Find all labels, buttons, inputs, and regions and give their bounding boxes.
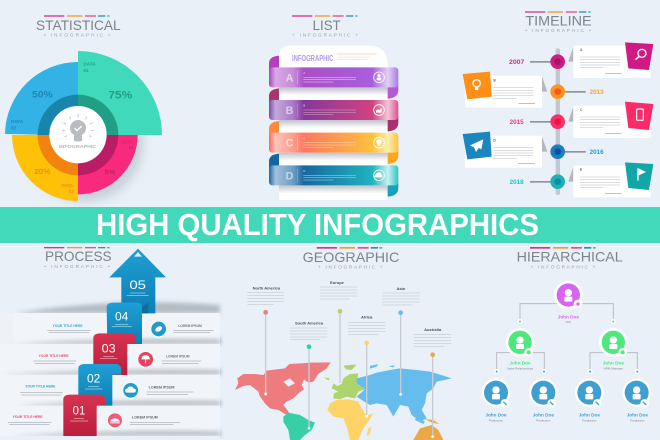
step 04: 04	[115, 310, 129, 324]
ribbon B: B	[286, 105, 294, 117]
pie chart: 20%	[34, 167, 51, 176]
node: hr manager: HRM Manager	[604, 366, 623, 370]
node: top	[554, 281, 583, 324]
ribbon A	[269, 56, 398, 99]
panel: geographic	[235, 247, 452, 440]
node: production 3: John Doe	[579, 413, 600, 418]
event 2013	[463, 72, 604, 108]
node: sales manager	[506, 328, 534, 370]
panel: statistical	[5, 15, 162, 202]
event 2013: 2013	[590, 89, 604, 96]
ribbon B: B	[303, 104, 305, 108]
arrow step 05: 05	[129, 278, 146, 292]
event 2018	[510, 162, 653, 197]
heading: list: LIST	[313, 17, 341, 33]
ribbon C: C	[303, 136, 305, 140]
heading: process: • INFOGRAPHIC •	[44, 264, 110, 269]
heading: timeline: • INFOGRAPHIC •	[525, 28, 591, 33]
pie chart: DATA	[62, 183, 74, 188]
pin: europe	[320, 280, 357, 383]
step 02: 02	[87, 372, 101, 386]
node: production 3	[575, 378, 604, 423]
center disc	[49, 106, 107, 163]
heading: list: + INFOGRAPHIC +	[292, 33, 358, 38]
panel: list	[269, 15, 398, 200]
row 01 text: LOREM IPSUM	[132, 416, 158, 420]
step 03: 03	[102, 341, 116, 355]
pie chart: 50%	[32, 90, 53, 100]
process bands	[0, 302, 220, 440]
step 02	[78, 364, 121, 406]
step 04	[107, 303, 148, 344]
event 2007: A	[580, 48, 583, 52]
ribbon A: A	[286, 72, 294, 84]
ribbon A: A	[303, 71, 305, 75]
row 01 text	[8, 411, 180, 429]
ribbon D	[269, 154, 398, 197]
segment: 20%	[12, 135, 78, 201]
continent: africa	[327, 399, 373, 440]
event 2007	[509, 42, 653, 78]
pin: africa	[348, 315, 385, 418]
step 01	[63, 395, 106, 436]
pin: europe: Europe	[330, 280, 345, 285]
pie chart: DATA	[83, 62, 96, 67]
center disc: INFOGRAPHIC	[59, 144, 97, 150]
banner	[0, 207, 660, 243]
heading: geographic	[303, 247, 399, 270]
node: production 1	[482, 378, 510, 423]
row 04 text: YOUR TITLE HERE	[53, 324, 83, 328]
panel: timeline	[463, 11, 653, 197]
node: production 1: John Doe	[485, 413, 507, 418]
event 2015: C	[580, 108, 583, 112]
ribbon D: D	[286, 170, 294, 182]
timeline spine	[556, 48, 560, 195]
pie chart: DATA	[11, 119, 24, 124]
event 2018: E	[580, 168, 583, 172]
world map	[235, 362, 452, 440]
heading: hierarchical	[517, 247, 623, 270]
pie chart: DATA	[121, 139, 134, 144]
node: production 2: John Doe	[533, 413, 554, 418]
node: sales manager: John Doe	[509, 361, 531, 366]
row 02 text: LOREM IPSUM	[149, 385, 174, 389]
node: production 1: Production	[489, 419, 503, 423]
pie chart	[5, 51, 162, 202]
arrow step 05	[109, 249, 166, 313]
node: hr manager: John Doe	[603, 361, 624, 366]
event 2015: 2015	[510, 119, 524, 126]
heading: geographic: GEOGRAPHIC	[303, 249, 399, 265]
pin: australia: Australia	[424, 327, 442, 332]
pin: north america	[247, 286, 284, 395]
event 2016	[463, 132, 604, 168]
continent: asia	[357, 364, 452, 424]
continent: south america	[283, 413, 315, 440]
banner title: HIGH QUALITY INFOGRAPHICS	[96, 207, 539, 242]
node: top: CEO	[565, 320, 571, 324]
node: production 3: Production	[582, 419, 597, 423]
panel: process	[0, 247, 220, 440]
node: top: John Doe	[558, 315, 579, 320]
node: production 2	[529, 378, 558, 423]
node: production 4	[622, 378, 651, 423]
pie chart: 03	[69, 189, 74, 194]
event 2016: 2016	[590, 149, 604, 156]
row 02 text: YOUR TITLE HERE	[25, 385, 56, 389]
row 04 text: LOREM IPSUM	[178, 324, 202, 328]
heading: geographic: + INFOGRAPHIC +	[318, 265, 383, 270]
heading: statistical: • INFOGRAPHIC •	[44, 33, 110, 38]
continent: europe	[324, 364, 365, 399]
connector dots	[494, 319, 640, 374]
heading: timeline: TIMELINE	[525, 12, 592, 28]
pie chart: 75%	[108, 90, 133, 102]
event 2018: 2018	[510, 179, 524, 186]
segment: 75%	[78, 51, 162, 135]
segment: 50%	[5, 62, 78, 135]
node: sales manager: Sales Relationships	[507, 366, 534, 370]
node: production 2: Production	[536, 419, 551, 423]
panel: hierarchical	[482, 247, 651, 423]
heading: hierarchical: + INFOGRAPHIC +	[531, 265, 596, 270]
event 2007: 2007	[509, 59, 525, 66]
row 03 text: YOUR TITLE HERE	[39, 354, 69, 358]
row 02 text	[20, 381, 193, 399]
pin: asia	[382, 286, 420, 396]
ribbon B	[269, 88, 398, 131]
pin: south america	[290, 321, 327, 430]
row 01 text: YOUR TITLE HERE	[13, 415, 43, 419]
list header: INFOGRAPHIC	[292, 53, 334, 63]
pie chart: 02	[11, 125, 17, 130]
ribbon D: D	[303, 169, 305, 173]
node: production 4: John Doe	[627, 413, 648, 418]
pin: asia: Asia	[396, 286, 406, 291]
step 03	[93, 333, 136, 375]
paper	[279, 46, 388, 200]
event 2016: D	[493, 138, 496, 142]
ribbon C	[269, 121, 398, 164]
event 2013: B	[493, 78, 496, 82]
step 01: 01	[73, 403, 86, 417]
row 03 text	[33, 350, 201, 368]
continent: north america	[235, 362, 331, 416]
row 03 text: LOREM IPSUM	[166, 354, 190, 358]
connector lines	[497, 304, 637, 372]
pin: africa: Africa	[361, 315, 373, 320]
ribbon C: C	[286, 138, 294, 150]
heading: list	[292, 15, 358, 38]
event 2015	[510, 102, 653, 138]
heading: hierarchical: HIERARCHICAL	[517, 248, 623, 264]
node: hr manager	[599, 328, 628, 370]
pie chart: 04	[129, 145, 134, 150]
pin: south america: South America	[295, 321, 324, 326]
pie chart: 5%	[104, 167, 116, 176]
pin: australia	[414, 327, 451, 438]
continent: australia	[413, 419, 443, 440]
segment: 5%	[78, 135, 138, 194]
pie chart: 01	[83, 68, 89, 73]
node: production 4: Production	[630, 419, 645, 423]
row 04 text	[47, 320, 213, 338]
pin: north america: North America	[253, 286, 281, 291]
heading: statistical: STATISTICAL	[36, 17, 121, 33]
heading: process: PROCESS	[45, 248, 112, 264]
